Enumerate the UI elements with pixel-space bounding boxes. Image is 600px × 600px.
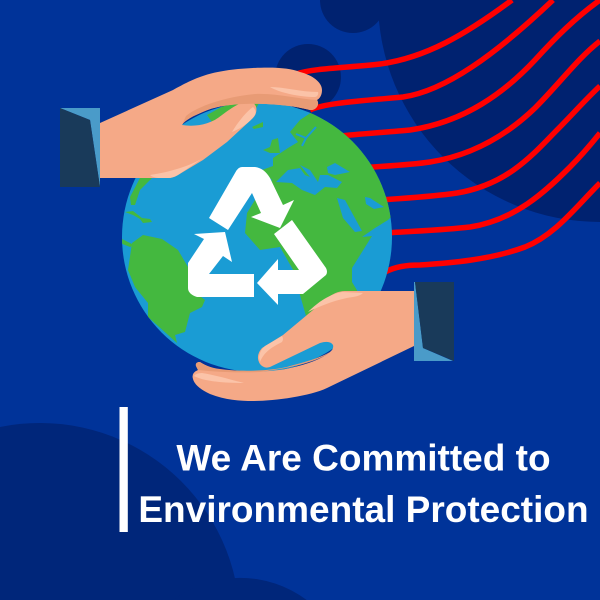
Red Sea xyxy=(337,198,362,232)
Eurasia and Africa xyxy=(245,113,390,316)
red wavy lines xyxy=(296,0,600,272)
cuff lining xyxy=(414,282,453,361)
British Isles xyxy=(263,138,280,153)
cuff lining xyxy=(60,108,100,187)
South America xyxy=(128,235,205,343)
vertical accent bar xyxy=(120,407,128,532)
sleeve xyxy=(415,282,454,361)
palm and fingers xyxy=(193,291,414,401)
top hand xyxy=(100,68,322,178)
title xyxy=(138,438,589,530)
Iceland xyxy=(252,122,263,129)
title: Environmental Protection xyxy=(138,489,589,530)
left arrow xyxy=(188,232,254,297)
sleeve xyxy=(60,108,100,187)
continents xyxy=(120,95,400,343)
Black Sea xyxy=(327,163,350,175)
top arrow xyxy=(209,167,294,230)
palm and fingers xyxy=(100,68,322,178)
Baltic xyxy=(296,127,316,146)
North America xyxy=(130,176,152,205)
thumb highlight xyxy=(232,107,256,132)
bottom hand xyxy=(193,291,414,401)
top cuff xyxy=(60,108,100,187)
palm highlight xyxy=(150,158,203,178)
finger crease xyxy=(196,352,330,372)
Greenland xyxy=(207,104,259,122)
bottom cuff xyxy=(414,282,454,361)
right arrow xyxy=(257,220,327,305)
finger highlight xyxy=(194,373,244,383)
Mediterranean xyxy=(276,165,342,195)
title: We Are Committed to xyxy=(176,438,551,478)
recycle symbol xyxy=(188,167,327,305)
palm highlight xyxy=(308,292,363,312)
Caribbean xyxy=(125,211,152,223)
thumb highlight xyxy=(259,336,283,362)
finger crease xyxy=(182,94,318,125)
globe xyxy=(120,95,400,372)
finger highlight xyxy=(270,87,318,97)
Central America xyxy=(122,239,132,247)
ocean xyxy=(122,102,392,372)
Persian Gulf xyxy=(365,197,384,209)
